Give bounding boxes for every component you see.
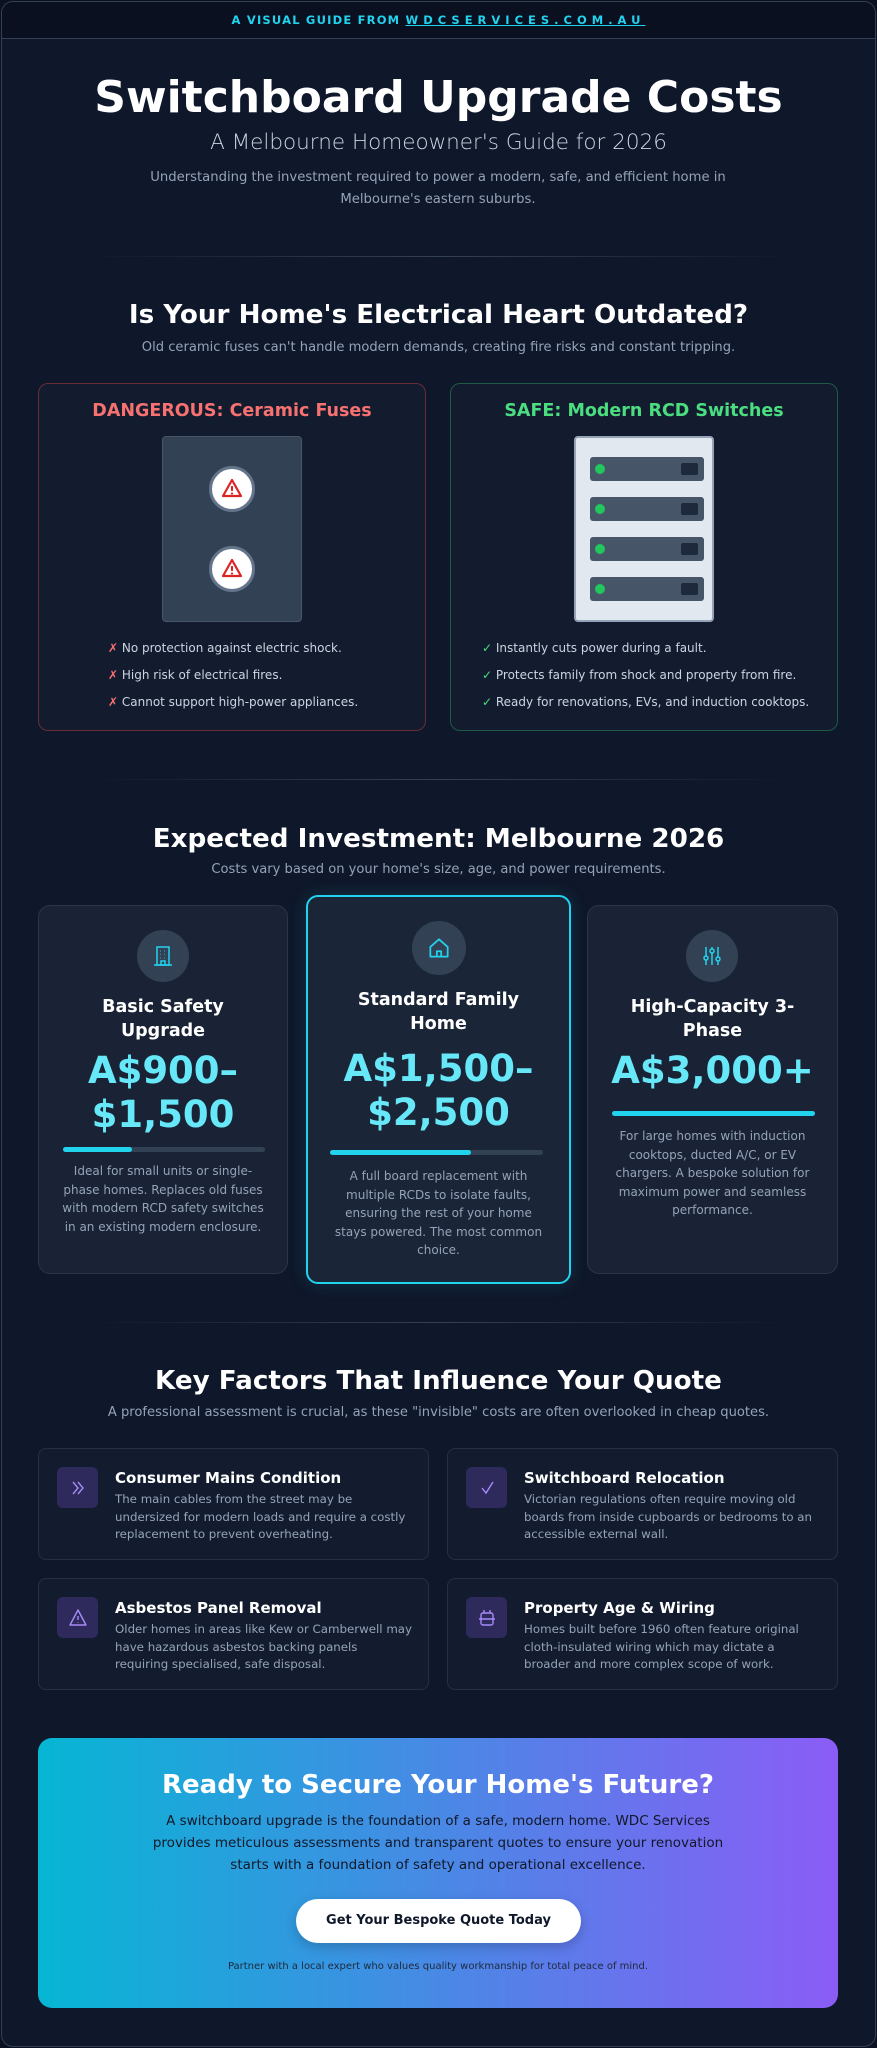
intro text: Understanding the investment required to power a modern, safe, and efficient home in Melbourne's eastern suburbs. — [150, 170, 726, 207]
card title: Phase — [683, 1021, 742, 1041]
factor: consumer mains — [38, 1448, 429, 1560]
risk list: ✗ Cannot support high-power appliances. — [108, 695, 358, 709]
icon: warning — [57, 1597, 98, 1638]
factor text — [114, 1492, 405, 1541]
card title — [358, 990, 519, 1034]
panel title: SAFE: Modern RCD Switches — [504, 401, 784, 421]
top banner — [2, 2, 875, 39]
title: Switchboard Upgrade Costs — [94, 72, 783, 123]
price — [88, 1049, 238, 1136]
icon: wiring — [466, 1597, 507, 1638]
factor text: Older homes in areas like Kew or Camberwell may — [115, 1622, 412, 1636]
RCD board illustration — [574, 436, 714, 622]
card: high capacity — [587, 905, 838, 1274]
heading: outdated: Is Your Home's Electrical Heart Outdated? — [129, 300, 748, 330]
progress bar — [612, 1111, 815, 1116]
icon: building — [137, 930, 189, 982]
icon: chevrons — [57, 1467, 98, 1508]
factor text: replacement to prevent overheating. — [115, 1527, 333, 1541]
factor text: undersized for modern loads and require a costly — [115, 1510, 405, 1524]
factor title: Property Age & Wiring — [524, 1599, 715, 1617]
price: A$3,000+ — [611, 1049, 814, 1092]
description: For large homes with induction cooktops, ducted A/C, or EV chargers. A bespoke solution for maximum power and seamless performance. — [616, 1129, 809, 1217]
factor text: accessible external wall. — [524, 1527, 668, 1541]
price: $2,500 — [367, 1091, 510, 1134]
card: basic — [38, 905, 288, 1274]
card: standard (featured) — [306, 895, 571, 1284]
icon: sliders — [686, 930, 738, 982]
factor: asbestos — [38, 1578, 429, 1690]
progress bar — [63, 1147, 265, 1152]
price: A$1,500– — [344, 1047, 533, 1090]
icon: house — [412, 921, 466, 975]
factor: property age — [447, 1578, 838, 1690]
heading: investment: Expected Investment: Melbourne 2026 — [153, 824, 724, 854]
subtitle: A Melbourne Homeowner's Guide for 2026 — [210, 130, 667, 155]
factor text: Victorian regulations often require moving old — [524, 1492, 795, 1506]
card title — [102, 997, 224, 1041]
card title: Standard Family — [358, 990, 519, 1010]
card title: Basic Safety — [102, 997, 224, 1017]
CTA button: Get Your Bespoke Quote Today — [326, 1913, 551, 1928]
factor text: The main cables from the street may be — [115, 1492, 352, 1506]
benefits list: ✓ Ready for renovations, EVs, and induction cooktops. — [482, 695, 809, 709]
benefits list — [482, 641, 809, 709]
progress bar — [330, 1150, 543, 1155]
risk list: ✗ High risk of electrical fires. — [108, 668, 282, 682]
description: A full board replacement with multiple RCDs to isolate faults, ensuring the rest of your home stays powered. The most common choice. — [335, 1169, 542, 1257]
benefits list: ✓ Instantly cuts power during a fault. — [482, 641, 707, 655]
CTA button — [296, 1899, 581, 1943]
panel: dangerous — [38, 383, 426, 731]
footnote: Partner with a local expert who values quality workmanship for total peace of mind. — [228, 1961, 648, 1972]
CTA panel — [38, 1738, 838, 2008]
factor title: Asbestos Panel Removal — [115, 1599, 322, 1617]
factor text: Homes built before 1960 often feature original — [524, 1622, 799, 1636]
factor text — [524, 1492, 812, 1541]
icon: check — [466, 1467, 507, 1508]
subheading: Costs vary based on your home's size, age, and power requirements. — [211, 862, 666, 877]
subheading: Old ceramic fuses can't handle modern demands, creating fire risks and constant tripping. — [142, 340, 735, 355]
factor text: boards from inside cupboards or bedrooms to an — [524, 1510, 812, 1524]
CTA heading: Ready to Secure Your Home's Future? — [162, 1770, 714, 1800]
risk list: ✗ No protection against electric shock. — [108, 641, 342, 655]
card title: Home — [410, 1014, 467, 1034]
factor text: requiring specialised, safe disposal. — [115, 1657, 325, 1671]
fuse box illustration — [162, 436, 302, 622]
description: Ideal for small units or single-phase homes. Replaces old fuses with modern RCD safety switches in an existing modern enclosure. — [62, 1164, 264, 1234]
icon: warning fuse — [209, 466, 255, 512]
risk list — [108, 641, 358, 709]
factor title: Switchboard Relocation — [524, 1469, 725, 1487]
heading: key factors: Key Factors That Influence Your Quote — [155, 1366, 722, 1396]
price — [344, 1047, 533, 1134]
factor text: have hazardous asbestos backing panels — [115, 1640, 357, 1654]
factor title: Consumer Mains Condition — [115, 1469, 341, 1487]
CTA text: A switchboard upgrade is the foundation of a safe, modern home. WDC Services provides meticulous assessments and transparent quotes to ensure your renovation starts with a foundation of safety and operational excellence. — [153, 1813, 723, 1873]
factor text — [524, 1622, 799, 1671]
panel title: DANGEROUS: Ceramic Fuses — [92, 401, 372, 421]
factor text — [115, 1622, 412, 1671]
benefits list: ✓ Protects family from shock and property from fire. — [482, 668, 796, 682]
icon: warning fuse — [209, 546, 255, 592]
panel: safe — [450, 383, 838, 731]
subheading: A professional assessment is crucial, as these "invisible" costs are often overlooked in cheap quotes. — [108, 1405, 769, 1420]
factor text: broader and more complex scope of work. — [524, 1657, 774, 1671]
card title — [631, 997, 794, 1041]
factor: relocation — [447, 1448, 838, 1560]
card title: High-Capacity 3- — [631, 997, 794, 1017]
factor text: cloth-insulated wiring which may dictate a — [524, 1640, 775, 1654]
price: $1,500 — [92, 1093, 234, 1136]
price: A$900– — [88, 1049, 238, 1092]
card title: Upgrade — [121, 1021, 205, 1041]
top banner: A VISUAL GUIDE FROM WDCSERVICES.COM.AU — [232, 13, 645, 27]
